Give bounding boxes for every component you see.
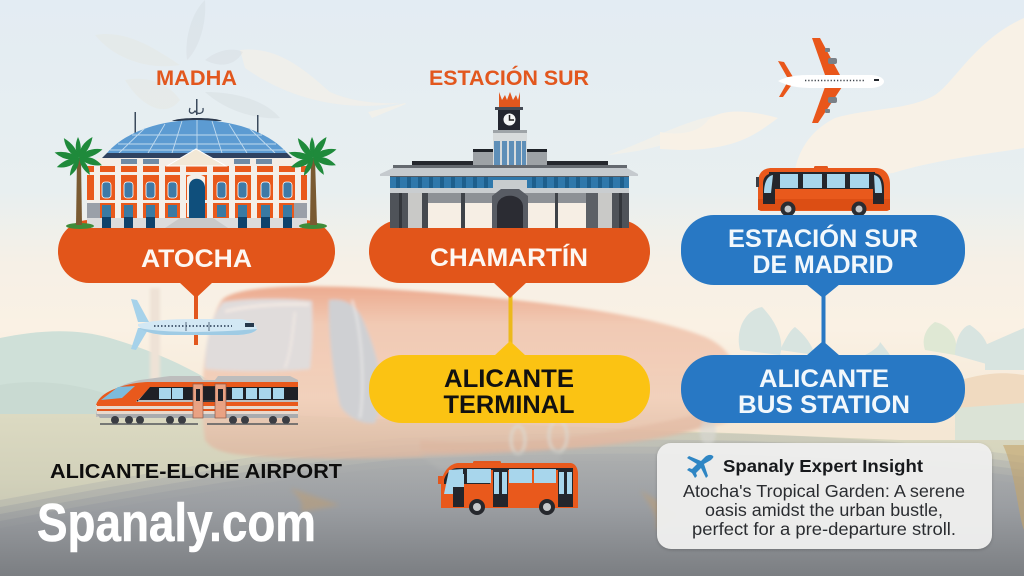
illustration: orange bus bottom <box>438 461 578 515</box>
background road <box>0 433 1024 576</box>
background trees <box>739 307 1024 370</box>
icon: airplane <box>687 455 713 478</box>
pill: Alicante Terminal <box>369 341 650 423</box>
pill: Chamartín: CHAMARTÍN <box>430 243 588 272</box>
label: Alicante-Elche Airport: ALICANTE-ELCHE AIRPORT <box>50 461 342 483</box>
background cream clouds <box>240 18 1024 175</box>
pill: Alicante Bus Station <box>681 341 965 423</box>
pill: Alicante Terminal: TERMINAL <box>444 391 574 419</box>
heading: MADHA: MADHA <box>156 67 237 90</box>
illustration: high-speed train <box>96 376 298 424</box>
right palm <box>288 135 337 229</box>
pill: Atocha: ATOCHA <box>141 245 252 273</box>
illustration: Atocha station with palms <box>54 99 337 229</box>
pill: Chamartín <box>369 220 650 298</box>
callout body: oasis amidst the urban bustle, <box>705 500 943 520</box>
connector: yellow line to Alicante Terminal <box>508 295 512 345</box>
illustration: orange airplane <box>778 38 884 123</box>
illustration: Chamartín station with clock tower <box>380 92 638 228</box>
connector: orange line from Atocha <box>194 283 198 345</box>
background orange hill and meadow <box>955 373 1024 415</box>
background hills <box>0 331 240 416</box>
callout: Spanaly Expert Insight <box>657 443 992 549</box>
pill: Estación Sur de Madrid: DE MADRID <box>752 251 894 279</box>
connector: blue line to Alicante Bus Station <box>822 295 826 345</box>
heading: ESTACIÓN SUR: ESTACIÓN SUR <box>429 66 589 90</box>
logo: Spanaly.com: Spanaly.com <box>37 493 316 553</box>
pill: Alicante Terminal: ALICANTE <box>444 365 574 393</box>
pill: Alicante Bus Station: ALICANTE <box>759 365 889 393</box>
pill: Estación Sur de Madrid: ESTACIÓN SUR <box>728 223 918 253</box>
callout title: Spanaly Expert Insight <box>723 456 923 476</box>
pill: Alicante Bus Station: BUS STATION <box>738 391 910 419</box>
background faded palm <box>95 0 280 118</box>
left palm <box>54 135 103 229</box>
background ground <box>0 414 1024 576</box>
pill: Atocha <box>58 220 335 298</box>
callout body: perfect for a pre-departure stroll. <box>692 519 956 539</box>
illustration: light blue airplane <box>131 299 257 350</box>
illustration: orange bus top right <box>756 166 890 216</box>
background road details <box>290 450 680 530</box>
callout body <box>683 481 965 539</box>
background faded bus <box>150 286 739 458</box>
callout body: Atocha's Tropical Garden: A serene <box>683 481 965 501</box>
pill: Estación Sur de Madrid <box>681 215 965 298</box>
